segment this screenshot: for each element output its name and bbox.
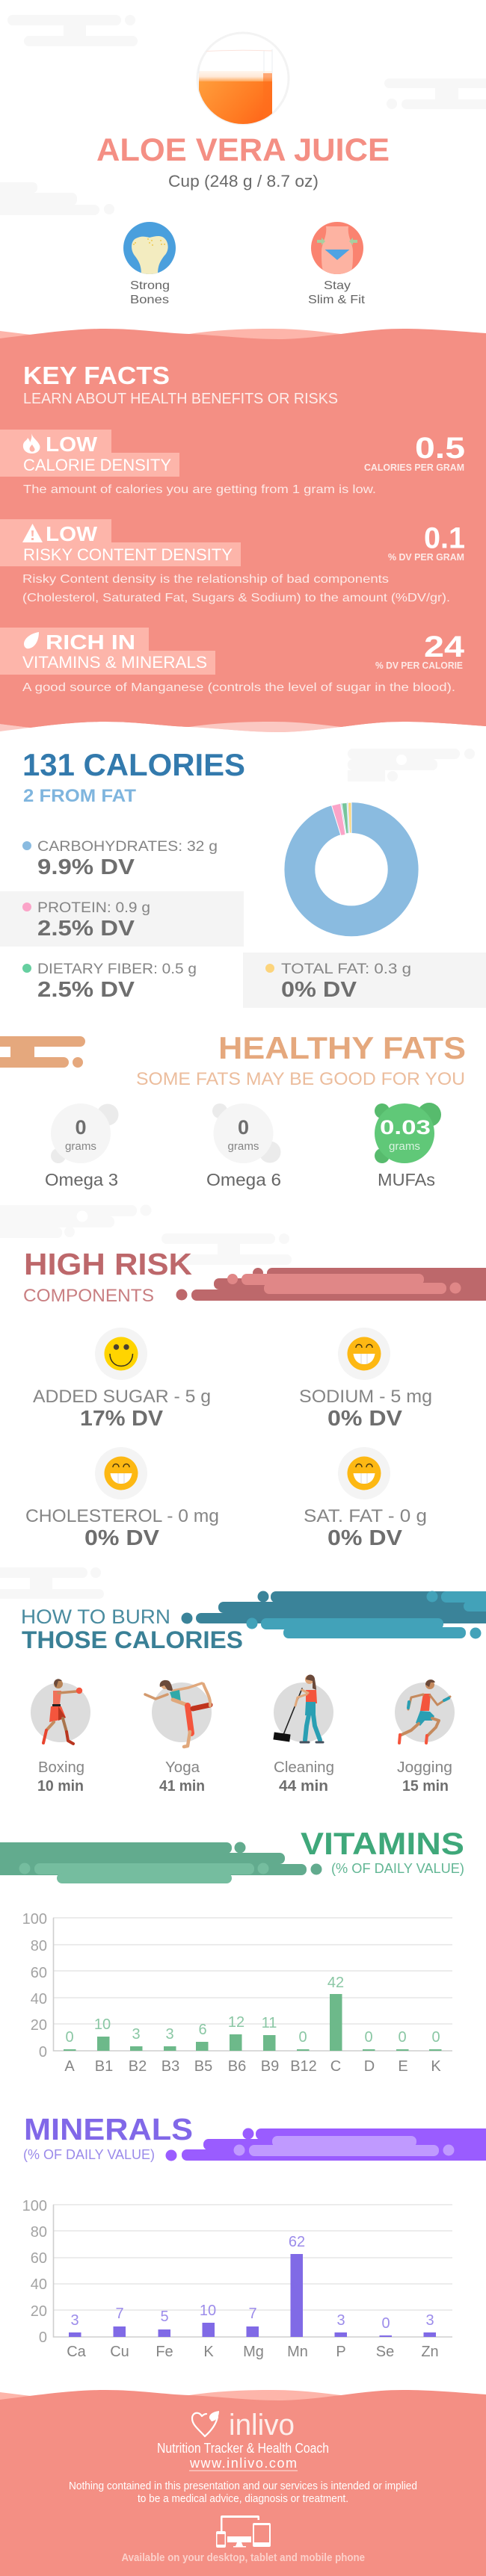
legend: total fat: TOTAL FAT: 0.3 g	[281, 961, 411, 977]
benefit: stay slim and fit	[308, 222, 366, 306]
legend: carbohydrates: 9.9% DV	[37, 855, 135, 879]
activity: cleaning: Cleaning	[274, 1759, 334, 1776]
value labels: 11	[262, 2015, 277, 2031]
donut chart: macronutrients	[300, 802, 403, 921]
risk item: sodium	[299, 1328, 432, 1431]
fat item: MUFAs: MUFAs	[378, 1170, 435, 1189]
fat item: omega 3	[45, 1103, 118, 1189]
fat item: omega 6: grams	[227, 1140, 259, 1153]
activity: boxing: Boxing	[38, 1759, 84, 1776]
icon: flame	[23, 433, 40, 453]
availability note: Available on your desktop, tablet and mobile phone	[121, 2551, 365, 2564]
legend: carbohydrates	[22, 838, 218, 879]
x axis labels: Fe	[156, 2344, 173, 2360]
serving size: Cup (248 g / 8.7 oz)	[168, 172, 319, 191]
value labels	[70, 2234, 434, 2332]
x axis labels: Se	[376, 2344, 394, 2360]
fat item: MUFAs: 0.03	[380, 1116, 431, 1139]
icon: slim waist	[311, 222, 363, 275]
decoration: vitamins banner	[0, 1842, 322, 1883]
label: Strong	[130, 279, 170, 292]
risk item: cholesterol	[25, 1447, 219, 1550]
fat item: omega 3: Omega 3	[45, 1170, 118, 1189]
y axis labels: 40	[31, 1991, 47, 2007]
bars	[64, 1994, 441, 2051]
activity: jogging: 15 min	[402, 1778, 449, 1795]
value labels: 3	[425, 2312, 434, 2329]
heading: key facts: KEY FACTS	[23, 362, 170, 390]
risk item: sodium: 0% DV	[327, 1407, 403, 1431]
value labels: 3	[165, 2026, 174, 2043]
fat item: MUFAs: grams	[389, 1140, 420, 1153]
legend: total fat	[243, 953, 486, 1008]
fact: rich in vitamins and minerals: A good source of Manganese (controls the level of sugar in the blood).	[22, 681, 455, 694]
icon: grin face	[347, 1337, 381, 1370]
bars	[69, 2254, 436, 2337]
y axis labels: 0	[39, 2329, 47, 2346]
risk item: added sugar: 17% DV	[80, 1407, 164, 1431]
x axis labels: A	[64, 2058, 75, 2075]
activity: cleaning: 44 min	[279, 1778, 328, 1795]
panel: footer	[0, 2390, 486, 2576]
risk item: added sugar: ADDED SUGAR - 5 g	[33, 1387, 211, 1407]
icon: warning	[22, 524, 43, 542]
heading: how to burn: HOW TO BURN	[21, 1606, 170, 1628]
label	[130, 279, 170, 306]
fat item: omega 3: grams	[65, 1140, 96, 1153]
bar chart: minerals	[22, 2198, 452, 2360]
x axis labels: C	[330, 2058, 341, 2075]
activity: yoga	[145, 1680, 212, 1795]
x axis labels: B1	[95, 2058, 113, 2075]
risk item: added sugar	[33, 1328, 211, 1431]
x axis labels: E	[398, 2058, 408, 2075]
fact: calorie density: CALORIE DENSITY	[23, 456, 171, 474]
subheading: LEARN ABOUT HEALTH BENEFITS OR RISKS	[23, 391, 338, 407]
value labels: 42	[327, 1975, 344, 1991]
legend: dietary fiber: DIETARY FIBER: 0.5 g	[37, 961, 197, 977]
value labels: 0	[381, 2315, 390, 2332]
risk item: cholesterol: 0% DV	[84, 1526, 160, 1550]
risk item: sodium: SODIUM - 5 mg	[299, 1387, 432, 1407]
value labels: 0	[431, 2029, 440, 2046]
subheading: components: COMPONENTS	[23, 1286, 154, 1306]
decoration: healthy fats banner	[0, 1036, 85, 1068]
heading: those calories: THOSE CALORIES	[22, 1626, 243, 1653]
heading: vitamins: VITAMINS	[301, 1826, 464, 1861]
icon: grin face	[105, 1457, 138, 1490]
fact: rich in vitamins and minerals: % DV PER CALORIE	[375, 660, 463, 671]
icon: grin face	[347, 1457, 381, 1490]
x axis labels: B9	[261, 2058, 279, 2075]
x axis labels: K	[431, 2058, 441, 2075]
fact: calorie density	[0, 430, 465, 496]
y axis labels: 20	[31, 2303, 47, 2320]
fat item: omega 6: Omega 6	[206, 1170, 281, 1189]
y axis labels: 60	[31, 1965, 47, 1981]
value labels: 7	[115, 2306, 124, 2322]
fact: risky content density: LOW	[46, 522, 98, 545]
icon: bone	[123, 222, 176, 275]
y axis labels: 20	[31, 2017, 47, 2034]
fat item: omega 6	[206, 1103, 281, 1189]
background cloud: burn	[0, 1567, 104, 1599]
value labels: 3	[70, 2312, 79, 2329]
activity: boxing: 10 min	[37, 1778, 84, 1795]
y axis labels	[22, 2198, 47, 2346]
heading: calories: 131 CALORIES	[22, 747, 245, 782]
icon: yoga pose	[145, 1680, 210, 1747]
fact: calorie density: 0.5	[415, 432, 465, 465]
value labels: 3	[132, 2026, 141, 2043]
legend: protein	[0, 891, 244, 947]
x axis labels: D	[364, 2058, 375, 2075]
subheading: SOME FATS MAY BE GOOD FOR YOU	[136, 1069, 465, 1089]
x axis labels: B2	[129, 2058, 147, 2075]
y axis labels: 100	[22, 1911, 47, 1928]
x axis labels: Cu	[110, 2344, 129, 2360]
fact: risky content density: RISKY CONTENT DENSITY	[23, 545, 233, 564]
value labels: 0	[364, 2029, 373, 2046]
disclaimer	[69, 2480, 417, 2505]
x axis labels: B3	[162, 2058, 179, 2075]
risk item: saturated fat: SAT. FAT - 0 g	[304, 1506, 427, 1526]
panel: key facts	[0, 329, 486, 740]
y axis labels: 100	[22, 2198, 47, 2214]
legend: protein: 2.5% DV	[37, 917, 135, 941]
icon: devices	[216, 2515, 271, 2548]
value labels: 3	[336, 2312, 345, 2329]
legend: total fat: 0% DV	[281, 978, 357, 1002]
x axis labels: P	[336, 2344, 346, 2360]
fact: rich in vitamins and minerals: 24	[424, 631, 465, 663]
subheading: percent of daily value: (% OF DAILY VALUE)	[331, 1860, 464, 1876]
label: Slim & Fit	[308, 294, 366, 306]
decoration: burn banner	[181, 1591, 486, 1639]
icon: inlivo heart logo	[192, 2411, 219, 2436]
x axis labels: Zn	[421, 2344, 439, 2360]
value labels: 10	[94, 2016, 111, 2033]
label: Stay	[324, 279, 351, 292]
risk item: cholesterol: CHOLESTEROL - 0 mg	[25, 1506, 219, 1526]
y axis labels: 0	[39, 2044, 47, 2061]
heading: healthy fats: HEALTHY FATS	[218, 1030, 466, 1065]
value labels: 5	[160, 2309, 169, 2325]
icon: boxer	[43, 1679, 82, 1744]
fat item: omega 6: 0	[238, 1116, 249, 1139]
value labels: 0	[298, 2029, 307, 2046]
risk item: saturated fat	[304, 1447, 427, 1550]
legend: dietary fiber	[22, 961, 197, 1002]
heading: minerals: MINERALS	[24, 2112, 193, 2146]
risk item: saturated fat: 0% DV	[327, 1526, 403, 1550]
legend: dietary fiber: 2.5% DV	[37, 978, 135, 1002]
x axis labels: K	[203, 2344, 214, 2360]
value labels: 62	[289, 2234, 305, 2250]
value labels: 12	[228, 2014, 244, 2031]
x axis labels: Ca	[67, 2344, 87, 2360]
x axis labels: Mg	[243, 2344, 264, 2360]
fact: calorie density: LOW	[46, 433, 98, 456]
legend: protein: PROTEIN: 0.9 g	[37, 900, 150, 916]
value labels: 0	[65, 2029, 74, 2046]
title: ALOE VERA JUICE	[96, 132, 390, 168]
decoration: high risk banner	[176, 1268, 486, 1301]
x axis labels: B6	[228, 2058, 246, 2075]
icon: leaf	[24, 632, 39, 648]
x axis labels	[67, 2344, 439, 2360]
benefit: strong bones	[123, 222, 176, 306]
icon: smile face	[105, 1337, 138, 1370]
disclaimer: Nothing contained in this presentation and our services is intended or implied	[69, 2480, 417, 2492]
subheading: from fat: 2 FROM FAT	[23, 786, 136, 806]
heading: high risk: HIGH RISK	[24, 1247, 192, 1281]
label	[308, 279, 366, 306]
subheading: percent of daily value: (% OF DAILY VALUE)	[23, 2146, 155, 2162]
x axis labels	[64, 2058, 441, 2075]
y axis labels	[22, 1911, 47, 2061]
fact: rich in vitamins and minerals: VITAMINS & MINERALS	[22, 653, 207, 672]
icon: jogger	[399, 1679, 450, 1743]
value labels: 6	[198, 2022, 207, 2038]
activity: cleaning	[273, 1675, 334, 1795]
activity: yoga: 41 min	[159, 1778, 205, 1795]
background cloud: calories	[348, 749, 475, 781]
disclaimer: to be a medical advice, diagnosis or treatment.	[138, 2493, 348, 2505]
value labels	[65, 1975, 440, 2046]
fact: risky content density: 0.1	[424, 521, 465, 554]
y axis labels: 40	[31, 2276, 47, 2293]
product image: juice glass	[197, 33, 289, 126]
value labels: 7	[248, 2306, 257, 2322]
background clouds: high risk	[0, 1204, 292, 1265]
fact: risky content density	[0, 519, 465, 604]
value labels: 10	[200, 2303, 216, 2319]
activity: yoga: Yoga	[165, 1759, 200, 1776]
fact: risky content density: % DV PER GRAM	[388, 551, 464, 563]
background clouds: top	[0, 15, 486, 215]
icon: person sweeping	[273, 1675, 323, 1742]
bar chart: vitamins	[22, 1911, 452, 2075]
x axis labels: Mn	[287, 2344, 308, 2360]
activity: jogging	[395, 1679, 455, 1795]
activity: jogging: Jogging	[397, 1759, 452, 1776]
fact: calorie density: CALORIES PER GRAM	[364, 462, 464, 473]
value labels: 0	[398, 2029, 407, 2046]
fact: risky content density: (Cholesterol, Saturated Fat, Sugars & Sodium) to the amount (%DV/gr).	[22, 592, 450, 604]
x axis labels: B5	[194, 2058, 212, 2075]
y axis labels: 80	[31, 1938, 47, 1954]
label: Bones	[130, 294, 169, 306]
fat item: omega 3: 0	[75, 1116, 87, 1139]
y axis labels: 80	[31, 2224, 47, 2241]
fact: rich in vitamins and minerals	[0, 628, 465, 694]
fact: rich in vitamins and minerals: RICH IN	[46, 631, 135, 654]
decoration: minerals banner	[166, 2128, 486, 2161]
y axis labels: 60	[31, 2250, 47, 2267]
legend: carbohydrates: CARBOHYDRATES: 32 g	[37, 838, 218, 855]
fact: calorie density: The amount of calories you are getting from 1 gram is low.	[23, 483, 376, 496]
website link: www.inlivo.com	[189, 2456, 297, 2471]
x axis labels: B12	[290, 2058, 317, 2075]
fact: risky content density: Risky Content density is the relationship of bad components	[22, 573, 389, 586]
activity: boxing	[31, 1679, 90, 1795]
logo wordmark: inlivo	[229, 2409, 295, 2442]
tagline: Nutrition Tracker & Health Coach	[157, 2441, 329, 2456]
fat item: MUFAs	[375, 1103, 441, 1189]
